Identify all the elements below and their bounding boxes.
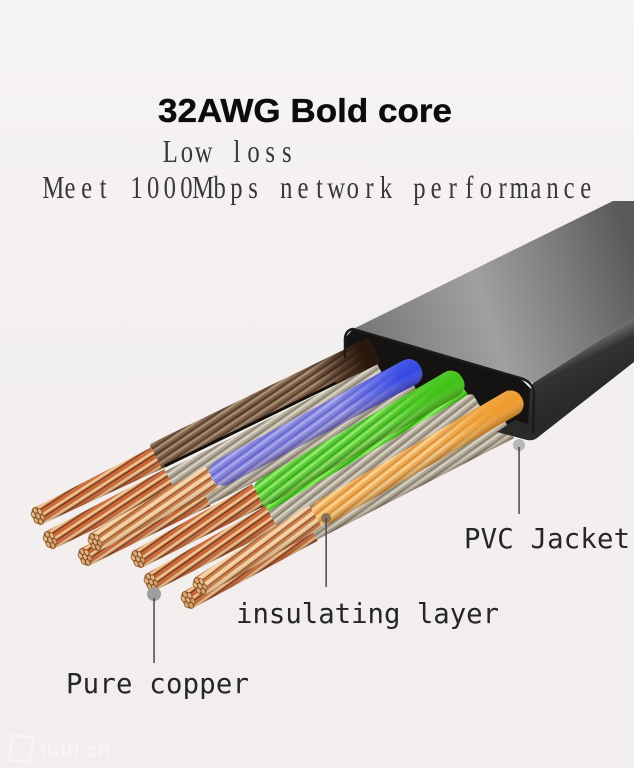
leader: insulating layer (321, 513, 331, 587)
jacket front lip (345, 329, 534, 433)
wire: green pair (127, 366, 473, 573)
secondary green stripe (257, 387, 473, 518)
cable mouth interior (345, 329, 534, 433)
copper conductor (40, 469, 175, 553)
clear sheath (266, 393, 483, 532)
leader: pure copper (147, 587, 161, 663)
blue insulation (206, 355, 427, 490)
green insulation (249, 366, 469, 509)
watermark text: tutti.ch (40, 740, 110, 762)
wire: brown pair (28, 338, 381, 529)
watermark icon (9, 735, 34, 762)
wire: clear stripe paired with orange (177, 420, 514, 613)
copper conductor (140, 506, 278, 596)
title: 32AWG Bold core (158, 93, 452, 130)
wire: clear stripe paired with blue (75, 378, 420, 570)
wire: blue (84, 355, 427, 556)
brown insulation (149, 338, 381, 470)
copper conductor (75, 484, 210, 570)
subtitle: low loss: Low loss (163, 134, 292, 170)
wire: clear stripe paired with green (140, 393, 483, 596)
copper conductor (177, 520, 318, 613)
clear sheath (163, 364, 387, 492)
orange insulation (307, 386, 528, 529)
leader: PVC jacket (513, 439, 525, 514)
watermark: tutti.ch (9, 735, 110, 762)
cable jacket (345, 201, 634, 440)
blue copper conductor (84, 467, 218, 556)
clear sheath (200, 378, 420, 505)
jacket top face (353, 201, 634, 383)
wire: clear stripe paired with brown (40, 364, 387, 553)
subtitle: network performance: Meet 1000Mbps network performance (42, 170, 591, 206)
label: PVC Jacket: PVC Jacket (464, 524, 630, 555)
orange copper conductor (189, 505, 322, 600)
label: insulating layer: insulating layer (236, 599, 499, 630)
wire: orange (189, 386, 528, 600)
clear sheath (307, 420, 514, 540)
jacket side face (497, 318, 634, 440)
label: Pure copper: Pure copper (66, 669, 249, 700)
green copper conductor (127, 484, 264, 573)
brown copper conductor (28, 447, 162, 529)
